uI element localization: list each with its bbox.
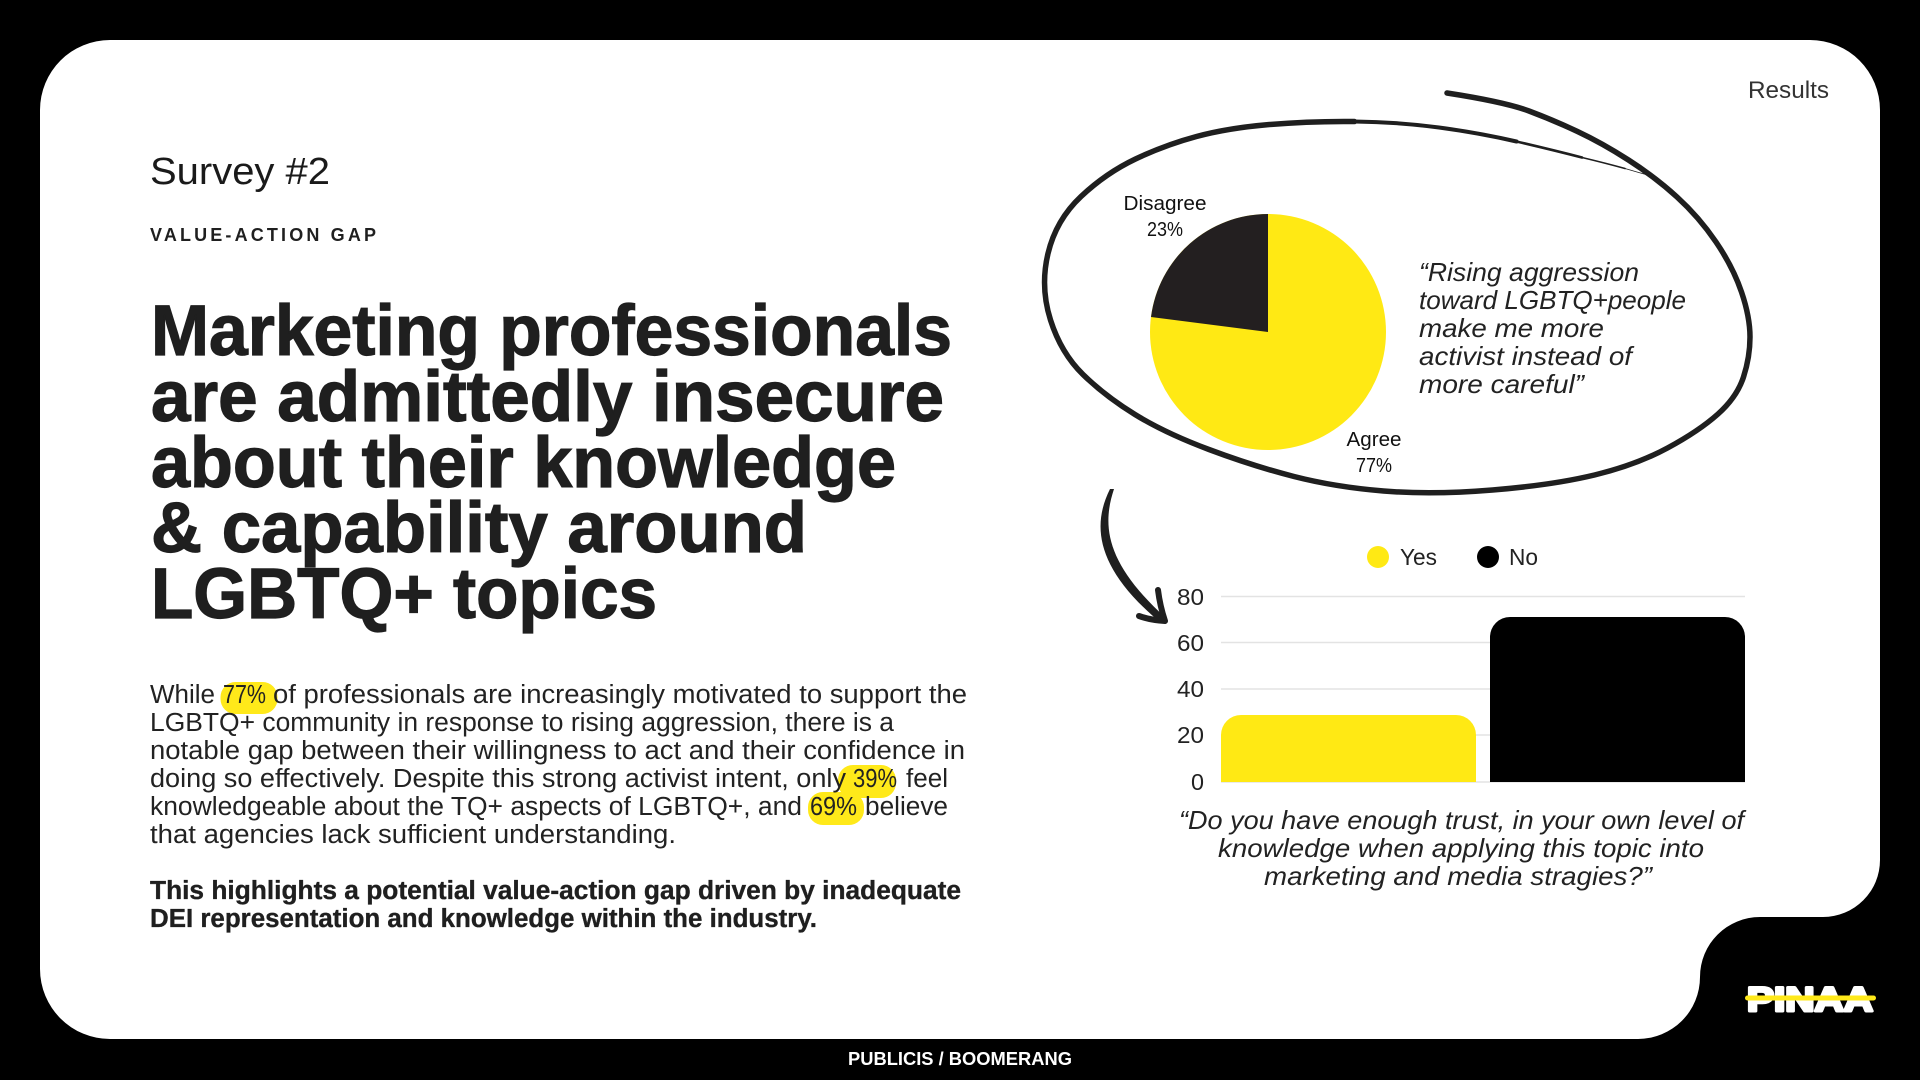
pie chart: agree vs disagree: 77%: [1356, 455, 1392, 477]
pull quote: toward LGBTQ+people: [1419, 285, 1686, 315]
body paragraph with highlighted percentages: knowledgeable about the TQ+ aspects of LGBTQ+, and: [150, 793, 802, 821]
bold conclusion text: DEI representation and knowledge within the industry.: [150, 905, 817, 933]
pull quote: make me more: [1419, 313, 1604, 343]
bar chart legend: No: [1509, 544, 1538, 570]
chart caption: marketing and media stragies?”: [1264, 861, 1653, 891]
body paragraph with highlighted percentages: of professionals are increasingly motivated to support the: [273, 681, 967, 709]
subheading: value-action gap: VALUE-ACTION GAP: [150, 225, 376, 245]
pull quote: more careful”: [1419, 369, 1585, 399]
body paragraph with highlighted percentages: LGBTQ+ community in response to rising aggression, there is a: [150, 709, 895, 737]
logo: PINAA: PINAA: [1747, 981, 1873, 1019]
bold conclusion text: [150, 877, 961, 933]
pie chart: agree vs disagree: Agree: [1346, 429, 1402, 451]
bar chart: yes vs no: 40: [1177, 676, 1204, 702]
bold conclusion text: This highlights a potential value-action gap driven by inadequate: [150, 877, 961, 905]
body paragraph with highlighted percentages: notable gap between their willingness to act and their confidence in: [150, 737, 965, 765]
body paragraph with highlighted percentages: believe: [865, 793, 948, 821]
bar chart: yes vs no: 20: [1177, 722, 1204, 748]
body paragraph with highlighted percentages: While: [150, 681, 215, 709]
bar chart: yes vs no: 80: [1177, 584, 1204, 610]
body paragraph with highlighted percentages: that agencies lack sufficient understanding.: [150, 821, 676, 849]
pie chart: agree vs disagree: [1124, 193, 1402, 477]
title: [151, 292, 952, 634]
chart caption: knowledge when applying this topic into: [1218, 833, 1704, 863]
section label: Results: Results: [1748, 77, 1829, 104]
bar chart: yes vs no: 60: [1177, 630, 1204, 656]
pull quote: activist instead of: [1419, 341, 1635, 371]
arrow from oval to chart: [1101, 489, 1166, 623]
title: are admittedly insecure: [151, 358, 944, 437]
body paragraph with highlighted percentages: feel: [906, 765, 948, 793]
chart caption: [1179, 805, 1747, 891]
body paragraph with highlighted percentages: [150, 681, 967, 849]
pie chart: agree vs disagree: Disagree: [1124, 193, 1206, 215]
bar chart: yes vs no: 0: [1191, 769, 1204, 795]
body paragraph with highlighted percentages: 69%: [810, 793, 857, 821]
chart caption: “Do you have enough trust, in your own level of: [1179, 805, 1747, 835]
body paragraph with highlighted percentages: 77%: [223, 681, 266, 709]
bar chart: yes vs no: [1177, 584, 1745, 795]
title: LGBTQ+ topics: [151, 555, 657, 634]
title: about their knowledge: [151, 424, 896, 503]
title: & capability around: [151, 489, 807, 568]
bar chart legend: Yes: [1400, 544, 1437, 570]
heading: Survey #2: Survey #2: [150, 151, 330, 193]
pie chart: agree vs disagree: 23%: [1147, 219, 1183, 241]
body paragraph with highlighted percentages: doing so effectively. Despite this strong activist intent, only: [150, 765, 846, 793]
body paragraph with highlighted percentages: 39%: [853, 765, 897, 793]
pull quote: [1419, 257, 1686, 399]
bar chart legend: [1367, 544, 1538, 570]
title: Marketing professionals: [151, 292, 952, 371]
pull quote: “Rising aggression: [1419, 257, 1639, 287]
hand-drawn speech oval: [1045, 93, 1750, 493]
footer credit: PUBLICIS / BOOMERANG: [848, 1049, 1072, 1069]
